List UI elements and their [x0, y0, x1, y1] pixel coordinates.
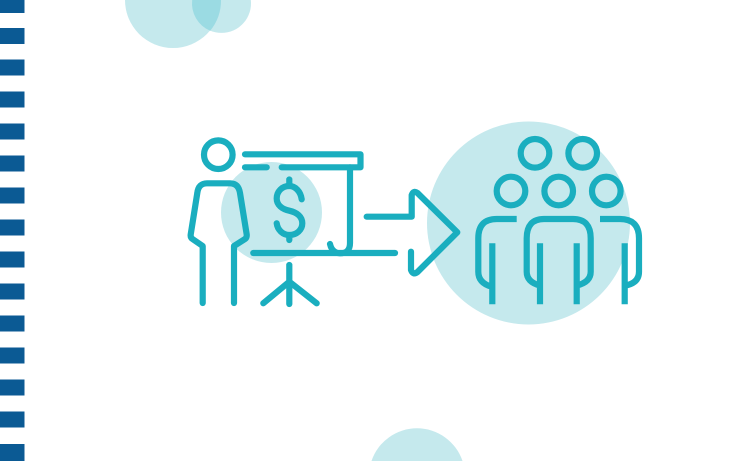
right audience member: [600, 219, 639, 304]
icon: arrow: [367, 192, 457, 273]
icon: audience group: [478, 139, 639, 304]
left edge stripe band: [0, 0, 24, 461]
board right edge and curl: [330, 167, 350, 253]
audience heads: [497, 139, 621, 205]
icon: dollar sign: [277, 180, 302, 240]
centre audience member: [527, 219, 591, 304]
background circle behind dollar sign: [221, 162, 322, 263]
presenter head: [204, 140, 233, 169]
board top rail: [245, 154, 360, 167]
icon: presentation board: [245, 154, 395, 304]
background circle behind audience: [427, 122, 630, 324]
left audience member: [478, 219, 517, 304]
decorative overlapping circles at top: [125, 0, 251, 48]
board tripod: [263, 265, 317, 304]
presenter body: [191, 183, 247, 303]
icon: presenter: [191, 140, 247, 303]
decorative circle at bottom: [372, 428, 462, 461]
board bottom line: [253, 250, 395, 256]
board short dash: [245, 164, 267, 170]
